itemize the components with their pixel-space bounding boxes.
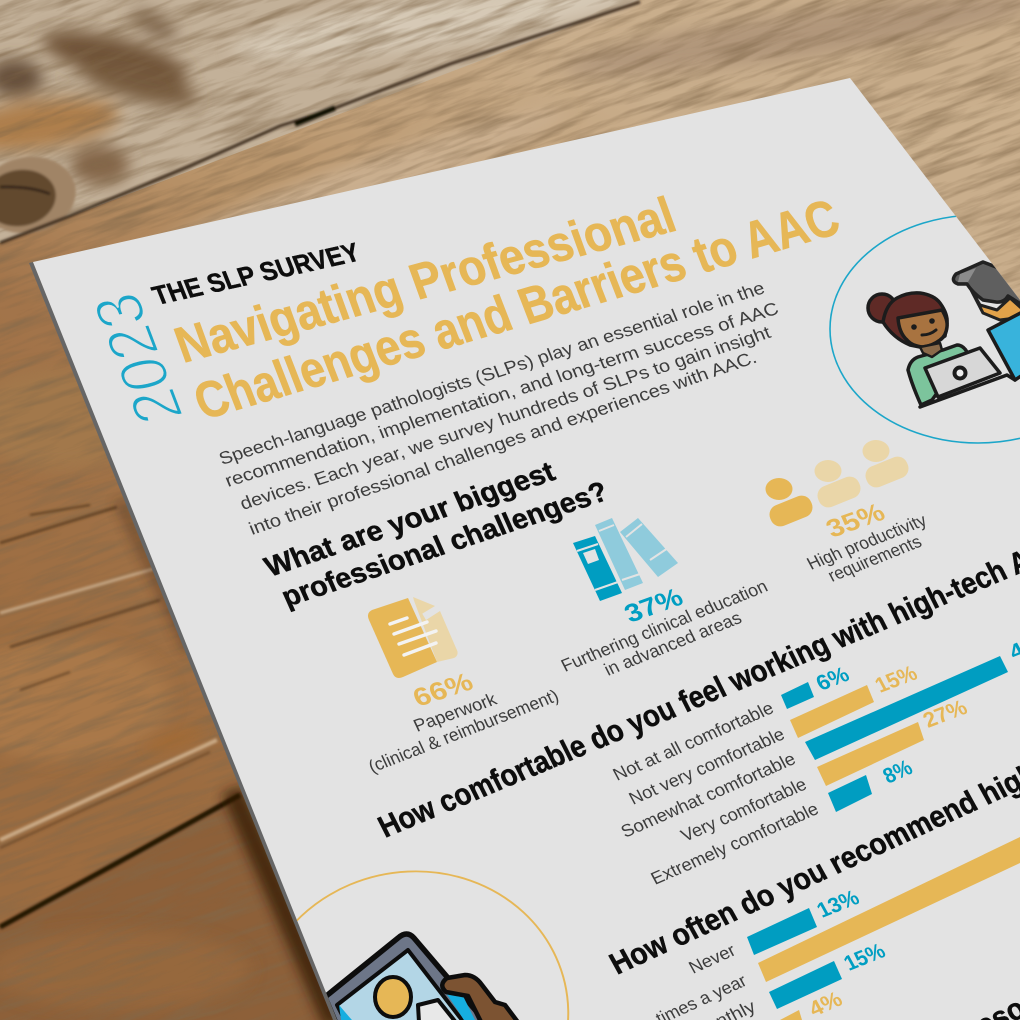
- values: 15%: [870, 660, 921, 697]
- icon: three people: [766, 440, 912, 529]
- icon: paperwork document: [368, 597, 458, 678]
- category labels: Somewhat comfortable: [617, 749, 799, 841]
- intro paragraph: recommendation, implementation, and long-term success of AAC: [222, 298, 781, 491]
- knot: [0, 149, 82, 241]
- values: [811, 625, 1020, 788]
- intro paragraph: devices. Each year, we survey hundreds of SLPs to gain insight: [237, 322, 773, 514]
- stat: 35% productivity: 35%: [821, 498, 890, 543]
- category labels: Never: [685, 940, 739, 977]
- stat: 37% clinical education: 37%: [620, 582, 688, 628]
- values: 13%: [812, 885, 863, 922]
- values: 6%: [811, 661, 853, 695]
- stat: 37% clinical education: in advanced areas: [601, 607, 745, 679]
- values: 8%: [879, 755, 916, 788]
- category labels: Extremely comfortable: [647, 799, 822, 888]
- intro paragraph: Speech-language pathologists (SLPs) play an essential role in the: [216, 277, 767, 469]
- year: 2023: 2023: [77, 287, 198, 430]
- paper cast shadow: [232, 790, 335, 1020]
- question: biggest professional challenges: What are your biggest: [260, 456, 560, 583]
- intro paragraph: into their professional challenges and experiences with AAC.: [246, 347, 759, 539]
- icon: tablet in gold circle: [296, 870, 570, 1020]
- bar chart: comfort: [609, 625, 1020, 888]
- plank seams: [0, 2, 640, 927]
- stat: 35% productivity: High productivity: [803, 510, 930, 573]
- brand title: The SLP Survey: THE SLP SURVEY: [148, 237, 364, 311]
- icon: two people at laptop in teal circle: [830, 215, 1020, 443]
- stat: 66% paperwork: 66%: [408, 667, 477, 712]
- category labels: Not very comfortable: [625, 724, 788, 808]
- bars: [781, 656, 1008, 812]
- category labels: Very comfortable: [677, 774, 810, 845]
- bars: [747, 837, 1020, 1020]
- main heading: Navigating Professional: [167, 186, 683, 373]
- stat: 37% clinical education: Furthering clinical education: [558, 576, 771, 675]
- values: 15%: [839, 938, 889, 975]
- category labels: Not at all comfortable: [609, 698, 777, 784]
- main heading: [167, 186, 847, 431]
- stat: 66% paperwork: (clinical & reimbursement): [365, 685, 562, 776]
- bar chart: recommendation frequency: [652, 837, 1020, 1020]
- intro paragraph: [216, 277, 781, 539]
- category labels: [652, 940, 759, 1020]
- values: [804, 885, 889, 1020]
- main heading: Challenges and Barriers to AAC: [186, 189, 847, 431]
- question: biggest professional challenges: professional challenges?: [277, 476, 613, 613]
- category labels: [609, 698, 822, 888]
- stat: 66% paperwork: Paperwork: [410, 689, 500, 736]
- stat: 35% productivity: requirements: [824, 531, 925, 585]
- values: 27%: [918, 695, 971, 732]
- icon: stack of books: [573, 518, 678, 601]
